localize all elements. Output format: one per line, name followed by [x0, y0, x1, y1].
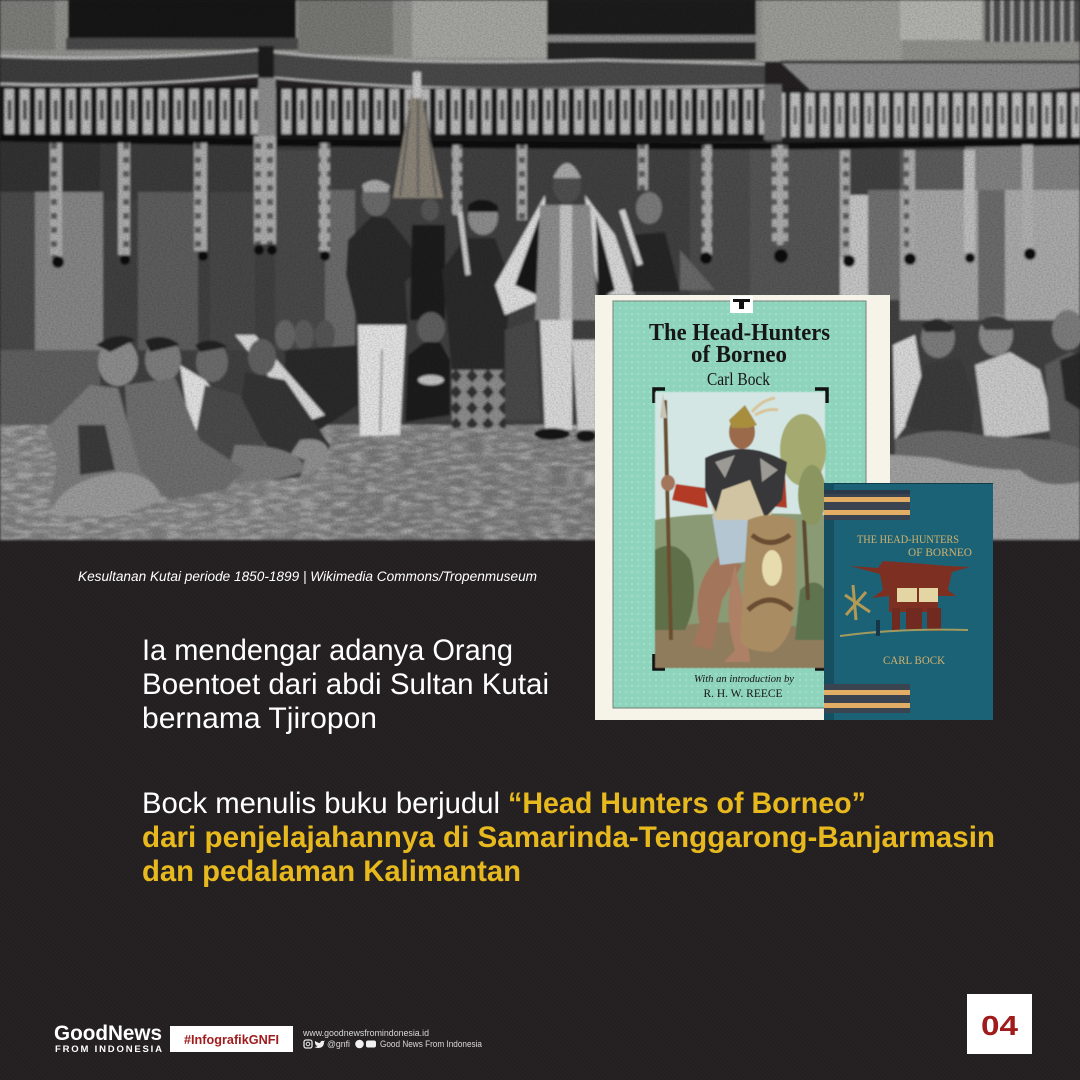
book title: of Borneo [691, 342, 787, 368]
hashtag badge: #InfografikGNFI [184, 1032, 279, 1047]
icon: youtube [366, 1040, 376, 1048]
female attendant, right [622, 192, 715, 292]
icon: twitter [314, 1040, 325, 1048]
courtyard ground [0, 350, 1080, 540]
dark windows [66, 0, 756, 60]
bottom gold stripes [824, 684, 910, 713]
paragraph: the book: “Head Hunters of Borneo” [508, 787, 866, 820]
book title: With an introduction by [694, 673, 794, 685]
top gold stripes [824, 490, 910, 520]
logo: GoodNews From Indonesia [54, 1021, 162, 1055]
book title: The Head-Hunters [649, 320, 830, 346]
paragraph: Tjiropon: bernama Tjiropon [142, 702, 377, 735]
book title [649, 320, 830, 700]
crop bracket marks [654, 389, 827, 669]
page number badge: 04 [981, 1010, 1018, 1041]
paragraph: Tjiropon [142, 634, 549, 735]
hashtag badge [170, 1026, 293, 1052]
paragraph: the book [142, 787, 995, 888]
hanging vertical ribbons [50, 136, 1036, 268]
paragraph: the book: Bock menulis buku berjudul [142, 787, 500, 820]
photo caption: Kesultanan Kutai periode 1850-1899 | Wikimedia Commons/Tropenmuseum [78, 569, 537, 584]
draped cloth wall [0, 135, 1080, 540]
gilt title: CARL BOCK [883, 655, 946, 667]
logo: GoodNews From Indonesia: GoodNews [54, 1021, 162, 1045]
gilt title: OF BORNEO [908, 547, 972, 559]
chief with white cape [495, 163, 635, 442]
seated row of people, left [45, 320, 358, 516]
logo: GoodNews From Indonesia: FROM INDONESIA [55, 1044, 162, 1055]
social media details [302, 1028, 482, 1049]
book title: R. H. W. REECE [704, 686, 782, 700]
hanging flag fringe [0, 78, 1080, 146]
photo grain [0, 0, 1080, 540]
icon: facebook [355, 1040, 364, 1048]
page number badge [967, 994, 1032, 1054]
standing man with white trousers [346, 180, 418, 436]
umbrella [393, 68, 443, 198]
attendant behind [410, 199, 445, 320]
paragraph: the book: dari penjelajahannya di Samarinda-Tenggarong-Banjarmasin [142, 821, 995, 854]
seated people, right [893, 310, 1080, 484]
book cover: original hardback edition [824, 483, 993, 720]
paragraph: Tjiropon: Boentoet dari abdi Sultan Kutai [142, 668, 549, 701]
valance cloth [0, 46, 1080, 93]
centre woman with batik skirt [442, 199, 510, 428]
photo: Kutai sultanate court [0, 0, 1080, 540]
publisher emblem [730, 296, 753, 313]
book title: Carl Bock [707, 369, 770, 389]
social media details: Good News From Indonesia [380, 1039, 482, 1049]
book cover: paperback edition [595, 295, 890, 720]
icon: instagram [304, 1040, 312, 1048]
stilt house emblem [840, 561, 970, 636]
gilt title: THE HEAD-HUNTERS [857, 532, 959, 546]
social media details: www.goodnewsfromindonesia.id [302, 1028, 429, 1038]
seated child [405, 312, 450, 422]
upper wooden wall [0, 0, 1080, 62]
social media details: @gnfi [327, 1039, 350, 1049]
gilt title [857, 532, 972, 667]
paragraph: the book: dan pedalaman Kalimantan [142, 855, 521, 888]
paragraph: Tjiropon: Ia mendengar adanya Orang [142, 634, 513, 667]
warrior illustration [655, 392, 826, 668]
